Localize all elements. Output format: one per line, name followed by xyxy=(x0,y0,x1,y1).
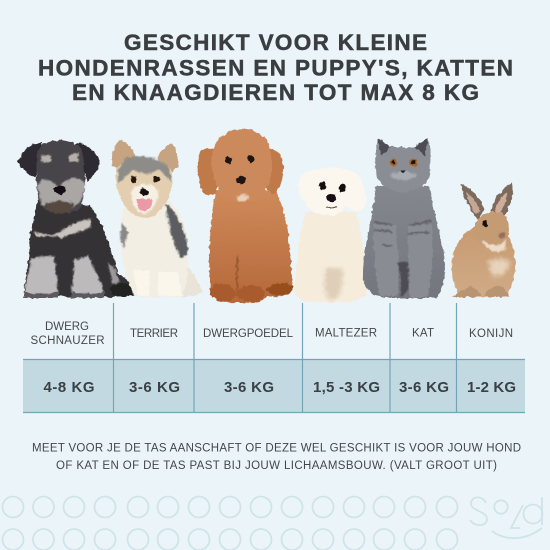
weight values: 3-6 KG xyxy=(399,379,449,396)
breed labels: KONIJN xyxy=(469,328,513,340)
animal: terrier xyxy=(112,140,202,297)
animal: dwergpoedel xyxy=(198,129,293,303)
animal: dwerg schnauzer xyxy=(18,140,136,298)
footnote: OF KAT EN OF DE TAS PAST BIJ JOUW LICHAAMSBOUW. (VALT GROOT UIT) xyxy=(56,460,497,472)
table rules xyxy=(23,303,525,412)
breed labels: TERRIER xyxy=(130,328,178,340)
footnote xyxy=(32,442,521,472)
breed labels: DWERGPOEDEL xyxy=(203,328,294,340)
weight values: 4-8 KG xyxy=(44,379,94,396)
table shaded weight row xyxy=(23,360,525,412)
logo: sold xyxy=(470,497,542,538)
title: EN KNAAGDIEREN TOT MAX 8 KG xyxy=(72,80,479,105)
breed labels: DWERG xyxy=(45,321,89,333)
footnote: MEET VOOR JE DE TAS AANSCHAFT OF DEZE WEL GESCHIKT IS VOOR JOUW HOND xyxy=(32,442,521,454)
animal: kat xyxy=(363,138,445,298)
breed labels xyxy=(30,321,513,347)
table: weight per breed xyxy=(23,303,525,412)
title: HONDENRASSEN EN PUPPY'S, KATTEN xyxy=(38,56,513,80)
weight values: 3-6 KG xyxy=(129,379,180,396)
decorative circle pattern xyxy=(2,496,458,550)
animal: konijn xyxy=(452,183,515,297)
weight values: 1-2 KG xyxy=(467,379,516,396)
breed labels: MALTEZER xyxy=(315,328,377,340)
breed labels: KAT xyxy=(412,328,434,340)
title xyxy=(38,30,513,105)
title: GESCHIKT VOOR KLEINE xyxy=(124,30,427,55)
breed labels: SCHNAUZER xyxy=(30,335,104,347)
animal: maltezer xyxy=(294,168,368,303)
weight values xyxy=(44,379,516,396)
weight values: 3-6 KG xyxy=(224,379,274,396)
weight values: 1,5 -3 KG xyxy=(313,379,380,396)
